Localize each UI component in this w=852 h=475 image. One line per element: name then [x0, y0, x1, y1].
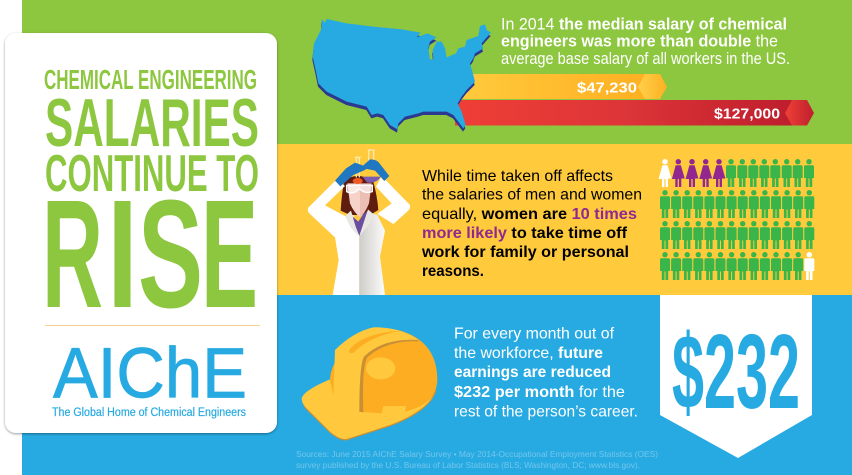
text: future earnings statement: earnings are reduced	[454, 364, 611, 381]
shirt	[351, 211, 368, 236]
gloves	[335, 163, 368, 186]
lab coat	[308, 179, 359, 295]
callout: $232 badge	[660, 295, 812, 458]
panel: yellow gender band	[22, 144, 852, 295]
face	[347, 183, 360, 217]
icon: US map	[312, 19, 491, 133]
text: median salary statement: engineers was more than double the	[501, 32, 778, 50]
text: median salary statement: average base salary of all workers in the US.	[501, 49, 790, 68]
text: time off statement: While time taken off affects	[422, 168, 613, 185]
goggles	[347, 185, 372, 193]
heading: rise	[42, 168, 258, 340]
panel: title card	[5, 33, 277, 433]
text: logo tagline: The Global Home of Chemical Engineers	[52, 407, 246, 419]
test tubes	[355, 150, 375, 177]
text: future earnings statement: For every month out of	[454, 326, 615, 342]
text: median salary statement	[501, 14, 790, 68]
text: time off statement: the salaries of men and women	[422, 186, 642, 204]
text: future earnings statement	[454, 326, 638, 420]
icon: hard hat	[302, 327, 437, 440]
text: sources	[296, 449, 658, 470]
heading: rise: E	[201, 168, 258, 340]
heading: rise: R	[42, 168, 103, 340]
bar: chemical engineer salary: $127,000	[714, 106, 780, 122]
heading: continue to: CONTINUE TO	[45, 144, 259, 202]
text: sources: Sources: June 2015 AIChE Salary Survey • May 2014-Occupational Employment Statistics (OES)	[296, 449, 658, 459]
bar: average salary	[455, 74, 667, 99]
liquids	[353, 178, 363, 184]
heading: rise: I	[107, 168, 138, 340]
bar: chemical engineer salary	[455, 100, 814, 126]
text: time off statement: more likely to take time off	[422, 225, 628, 242]
row 1	[659, 159, 814, 187]
text: future earnings statement: the workforce, future	[454, 345, 603, 362]
row 3	[660, 221, 814, 249]
logo: AIChE: AIChE	[53, 334, 247, 414]
heading: salaries: SALARIES	[45, 85, 259, 161]
salary bars	[455, 74, 814, 126]
heading: chemical engineering: CHEMICAL ENGINEERING	[44, 64, 257, 95]
hair	[341, 176, 378, 215]
panel: green salary band	[22, 0, 852, 144]
text: future earnings statement: rest of the person’s career.	[454, 404, 638, 420]
illustration: woman scientist	[308, 150, 410, 295]
heading: rise: S	[138, 168, 203, 340]
pictogram: people	[659, 159, 814, 280]
text: time off statement: equally, women are 10 times	[422, 206, 637, 223]
bar: average salary: $47,230	[577, 80, 637, 96]
text: time off statement: reasons.	[422, 263, 484, 280]
row 2	[660, 190, 814, 218]
collar	[345, 211, 358, 236]
row 4	[660, 252, 814, 280]
text: median salary statement: In 2014 the median salary of chemical	[501, 14, 787, 34]
panel: blue career band	[22, 295, 852, 475]
text: future earnings statement: $232 per month for the	[454, 384, 625, 401]
text: time off statement	[421, 168, 642, 280]
text: sources: survey published by the U.S. Bureau of Labor Statistics (BLS; Washington, DC; www.bls.gov).	[296, 460, 640, 470]
text: time off statement: work for family or personal	[421, 244, 629, 261]
